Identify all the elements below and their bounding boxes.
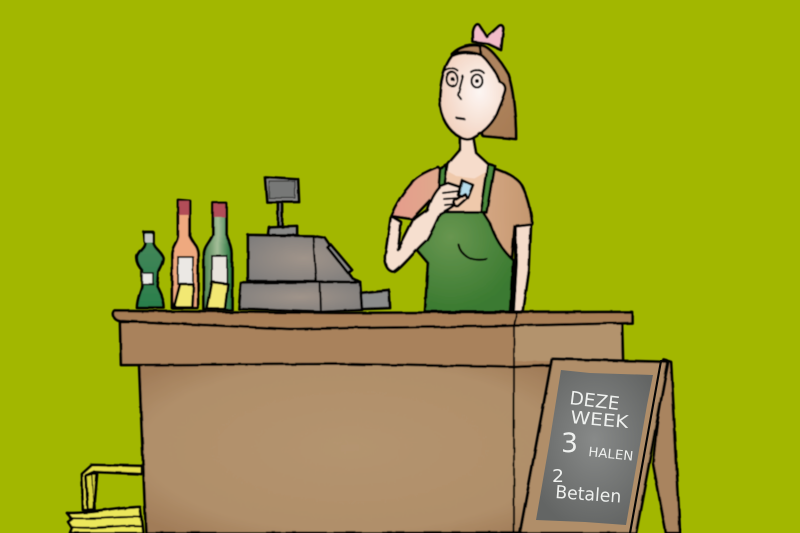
thumb [454, 194, 467, 206]
basket handle [82, 465, 142, 510]
eyes [445, 69, 484, 88]
register stem [278, 202, 282, 226]
board front frame [520, 359, 668, 533]
face [440, 53, 506, 139]
text: 2: 2 [552, 466, 564, 487]
nose [458, 76, 463, 99]
text: 3: 3 [561, 428, 578, 459]
text: Betalen: Betalen [555, 482, 622, 508]
chalk surface [536, 370, 653, 525]
cash register [239, 177, 390, 312]
sandwich board [520, 359, 680, 533]
basket stack [67, 507, 143, 533]
apron chest curve [459, 245, 487, 260]
apron body [417, 212, 513, 312]
chalk text [552, 388, 634, 508]
register base [239, 282, 362, 312]
counter upper front [120, 322, 623, 367]
counter [113, 311, 632, 533]
baskets [67, 465, 143, 533]
blue card [458, 180, 473, 198]
bottles [137, 200, 232, 310]
register drawer handle [361, 290, 390, 309]
counter top slab [113, 311, 632, 329]
fingers [443, 191, 459, 205]
left arm with hand [385, 183, 460, 272]
cashier [385, 24, 532, 312]
bow [473, 24, 503, 50]
apron [417, 164, 513, 312]
chest skin [438, 170, 488, 211]
counter corner lines [514, 312, 517, 533]
right arm [513, 224, 531, 312]
fringe hair [452, 45, 481, 55]
neck [440, 134, 488, 212]
hair back [452, 45, 516, 139]
board back leg [653, 360, 680, 533]
bottle: dark green [204, 203, 232, 310]
register upper body [248, 235, 360, 282]
counter lower body [139, 362, 560, 533]
register display [265, 177, 299, 202]
text: WEEK: WEEK [570, 408, 630, 433]
shirt [391, 167, 532, 262]
register keys [328, 245, 352, 273]
bottle: rosé [172, 200, 198, 308]
mouth [457, 118, 464, 119]
text: HALEN: HALEN [588, 445, 634, 465]
board side panel [630, 361, 661, 533]
bottle: small green [137, 232, 164, 308]
text: DEZE: DEZE [568, 388, 621, 415]
apron straps [437, 165, 447, 212]
